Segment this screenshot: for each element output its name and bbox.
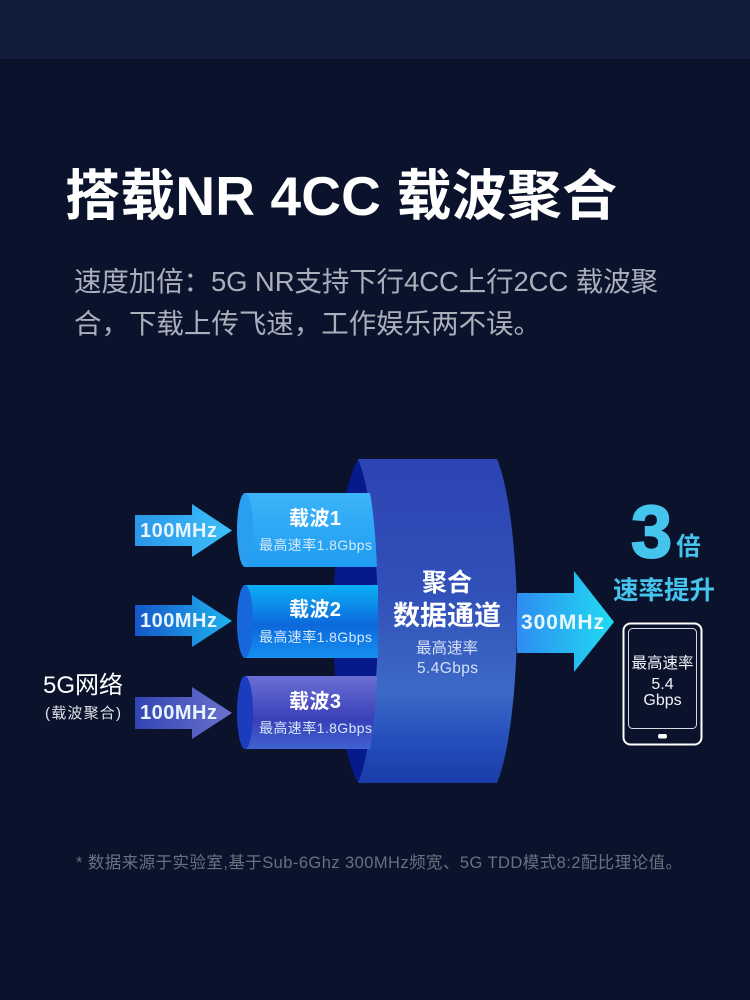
- callout: 3x speed increase: 速率提升: [613, 577, 715, 605]
- footnote: * 数据来源于实验室,基于Sub-6Ghz 300MHz频宽、5G TDD模式8:2配比理论值。: [76, 853, 682, 872]
- description text: 合，下载上传飞速，工作娱乐两不误。: [74, 308, 541, 339]
- arrow: 100MHz carrier 2: [135, 595, 232, 647]
- callout: 3x speed increase: 倍: [676, 533, 701, 561]
- carrier 2 cylinder: [237, 585, 378, 658]
- arrow: 100MHz carrier 3: [135, 687, 232, 739]
- callout: 3x speed increase: [613, 490, 715, 605]
- arrow: 100MHz carrier 1: [135, 504, 232, 557]
- label: 5G network: (载波聚合): [45, 705, 121, 722]
- arrow: 100MHz carrier 1: 100MHz: [140, 520, 217, 542]
- label: 5G network: [43, 672, 123, 722]
- icon: phone with max speed: Gbps: [643, 692, 682, 709]
- carrier 3 cylinder: [237, 676, 377, 749]
- aggregation data channel cylinder: 聚合: [422, 569, 472, 597]
- aggregation data channel cylinder: 5.4Gbps: [417, 660, 478, 677]
- description text: [74, 266, 658, 339]
- arrow: 300MHz output: 300MHz: [521, 611, 604, 634]
- aggregation data channel cylinder: [358, 459, 517, 783]
- callout: 3x speed increase: 3: [631, 490, 672, 573]
- label: 5G network: 5G网络: [43, 672, 123, 699]
- arrow: 300MHz output: [517, 571, 614, 672]
- description text: 速度加倍：5G NR支持下行4CC上行2CC 载波聚: [74, 266, 658, 297]
- carrier 3 cylinder: 最高速率1.8Gbps: [259, 720, 372, 736]
- carrier 1 cylinder: 载波1: [289, 507, 341, 530]
- arrow: 100MHz carrier 3: 100MHz: [140, 702, 217, 724]
- aggregation data channel cylinder: 最高速率: [416, 639, 478, 657]
- carrier 1 cylinder: [237, 493, 377, 567]
- aggregation cylinder back: [333, 459, 400, 783]
- carrier 3 cylinder: 载波3: [289, 690, 341, 713]
- icon: phone with max speed: 5.4: [651, 676, 674, 693]
- carrier 2 cylinder: 最高速率1.8Gbps: [259, 629, 372, 645]
- arrow: 100MHz carrier 2: 100MHz: [140, 610, 217, 632]
- aggregation data channel cylinder: 数据通道: [393, 601, 501, 631]
- icon: phone with max speed: [624, 624, 702, 744]
- carrier 1 cylinder: 最高速率1.8Gbps: [259, 537, 372, 553]
- title: 搭载NR 4CC 载波聚合: [65, 165, 617, 227]
- icon: phone with max speed: 最高速率: [631, 654, 694, 672]
- carrier 2 cylinder: 载波2: [289, 598, 341, 621]
